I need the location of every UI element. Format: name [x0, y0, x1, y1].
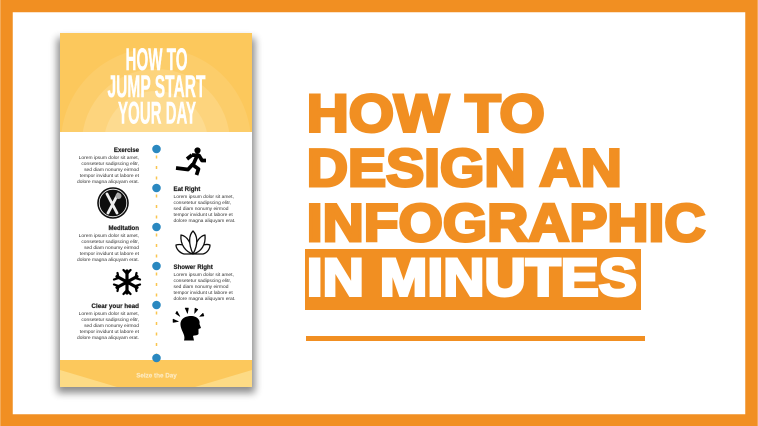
footer text: Seize the Day	[136, 372, 177, 380]
text block: Clear your head: Lorem ipsum dolor sit amet,	[79, 311, 139, 317]
text block: Shower Right: Shower Right	[174, 264, 213, 271]
text block: Eat Right: tempor invidunt ut labore et	[174, 212, 233, 218]
text block: Clear your head: tempor invidunt ut labore et	[80, 329, 140, 335]
card title: HOW TO	[126, 41, 188, 77]
card title: YOUR DAY	[118, 94, 196, 130]
text block: Meditation: Meditation	[109, 225, 139, 232]
text block: Exercise: Lorem ipsum dolor sit amet,	[79, 155, 139, 161]
icon: snowflake	[114, 270, 140, 294]
text block: Exercise: tempor invidunt ut labore et	[80, 173, 140, 179]
icon: head with idea rays	[173, 308, 204, 340]
text block: Clear your head: consetetur sadipscing elitr,	[81, 317, 139, 323]
icon: lotus	[176, 231, 210, 254]
card header: JUMP START	[108, 68, 206, 104]
highlighted headline line: IN MINUTES	[307, 248, 637, 308]
text block: Eat Right: Eat Right	[174, 186, 200, 193]
card header	[60, 33, 252, 132]
text block: Meditation: Lorem ipsum dolor sit amet,	[79, 233, 139, 239]
text block: Shower Right	[174, 264, 235, 302]
text block: Shower Right: tempor invidunt ut labore et	[174, 290, 233, 296]
card footer	[60, 360, 252, 387]
text block: Eat Right: consetetur sadipscing elitr,	[174, 200, 231, 206]
main headline: DESIGN AN	[307, 139, 622, 198]
text block: Meditation: consetetur sadipscing elitr,	[81, 239, 139, 245]
text block: Exercise: consetetur sadipscing elitr,	[81, 161, 139, 167]
timeline	[152, 145, 161, 362]
icon: runner	[176, 147, 206, 175]
text block: Exercise: Exercise	[114, 147, 140, 154]
text block: Clear your head	[77, 303, 140, 341]
text block: Exercise: dolore magna aliquyam erat.	[77, 179, 139, 185]
text block: Meditation	[77, 225, 140, 263]
text block: Meditation: dolore magna aliquyam erat.	[77, 257, 139, 263]
icon: fork and knife badge	[97, 187, 129, 219]
text block: Shower Right: Lorem ipsum dolor sit amet,	[174, 272, 234, 278]
main headline	[307, 84, 706, 253]
text block: Exercise: sed diam nonumy eirmod	[84, 167, 139, 173]
divider rule	[306, 336, 645, 341]
text block: Eat Right: sed diam nonumy eirmod	[174, 206, 229, 212]
text block: Shower Right: consetetur sadipscing elitr,	[174, 278, 231, 284]
text block: Shower Right: sed diam nonumy eirmod	[174, 284, 229, 290]
text block: Meditation: tempor invidunt ut labore et	[80, 251, 140, 257]
main headline: HOW TO	[307, 84, 545, 144]
text block: Exercise	[77, 147, 140, 185]
text block: Clear your head: Clear your head	[91, 303, 139, 310]
text block: Eat Right: Lorem ipsum dolor sit amet,	[174, 194, 234, 200]
text block: Shower Right: dolore magna aliquyam erat.	[174, 296, 235, 302]
infographic card	[60, 33, 252, 387]
text block: Clear your head: sed diam nonumy eirmod	[84, 323, 139, 329]
text block: Eat Right	[174, 186, 235, 224]
card title	[108, 41, 206, 130]
card shadow	[57, 38, 255, 393]
text block: Meditation: sed diam nonumy eirmod	[84, 245, 139, 251]
text block: Clear your head: dolore magna aliquyam erat.	[77, 335, 139, 341]
text block: Eat Right: dolore magna aliquyam erat.	[174, 218, 235, 224]
main headline: INFOGRAPHIC	[307, 194, 706, 253]
